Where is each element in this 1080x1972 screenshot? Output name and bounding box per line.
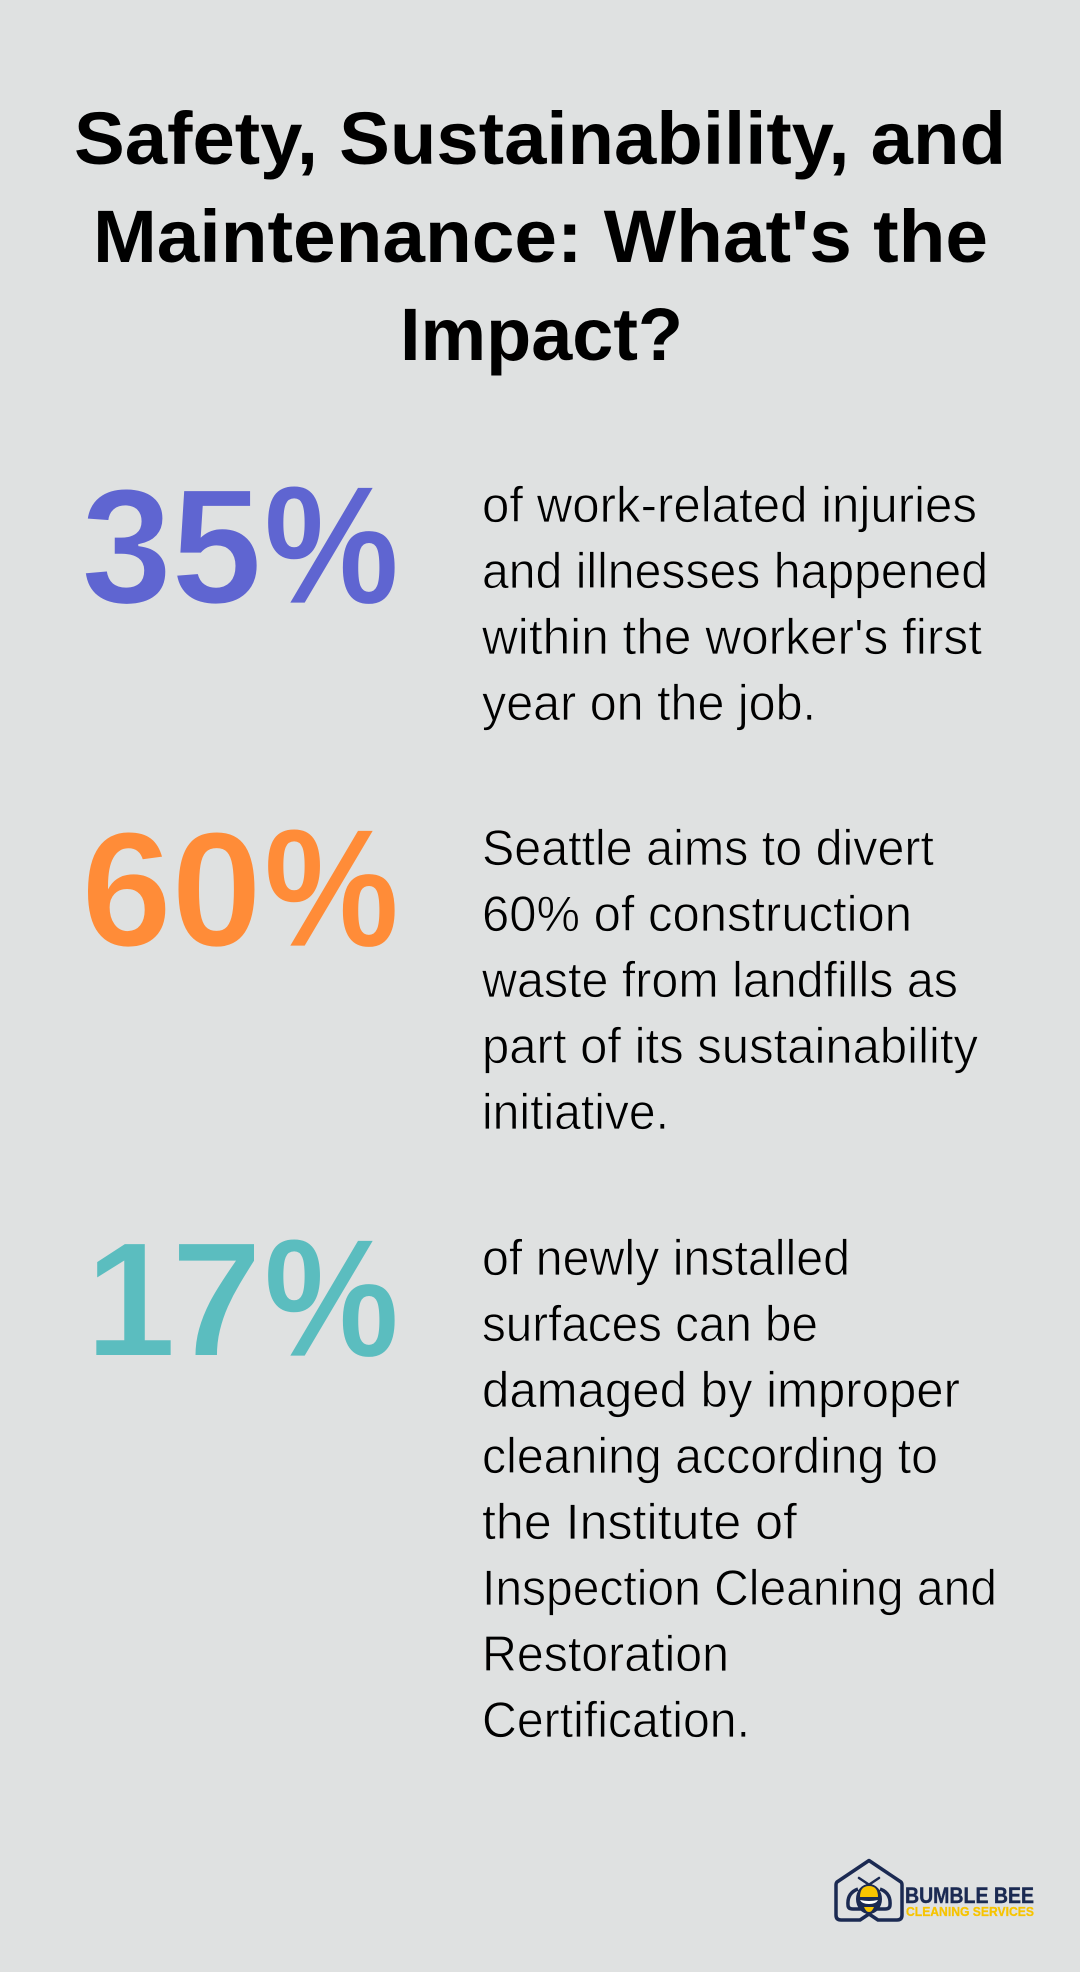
text block: improper cleaning damage: of newly installed xyxy=(482,1230,850,1286)
text block: Seattle construction waste xyxy=(481,820,978,1140)
title xyxy=(74,97,1006,376)
title: Safety, Sustainability, and xyxy=(74,97,1006,180)
text block: improper cleaning damage: cleaning according to xyxy=(482,1428,938,1484)
stat: 35%: 35 xyxy=(81,455,262,638)
stat: 60%: 60 xyxy=(81,798,262,981)
text block: work-related injuries: and illnesses happened xyxy=(482,543,988,599)
text block: Seattle construction waste: initiative. xyxy=(482,1084,669,1140)
text block: Seattle construction waste: waste from landfills as xyxy=(481,952,958,1008)
text block: work-related injuries xyxy=(481,477,988,731)
text block: improper cleaning damage: Inspection Cleaning and xyxy=(482,1560,997,1616)
text block: improper cleaning damage: surfaces can be xyxy=(482,1296,818,1352)
stat: 60% xyxy=(81,794,399,982)
text block: improper cleaning damage: Restoration xyxy=(482,1626,729,1682)
stat: 17% xyxy=(85,1204,399,1392)
stat: 17%: % xyxy=(264,1204,399,1392)
text block: work-related injuries: year on the job. xyxy=(482,675,816,731)
text block: improper cleaning damage: the Institute of xyxy=(482,1494,797,1550)
text block: Seattle construction waste: part of its sustainability xyxy=(482,1018,978,1074)
text block: Seattle construction waste: 60% of construction xyxy=(482,886,912,942)
icon: house with bee xyxy=(836,1860,902,1920)
stat: 60%: % xyxy=(264,794,399,982)
text block: work-related injuries: within the worker's first xyxy=(481,609,982,665)
title: Impact? xyxy=(400,293,683,376)
logo: Bumble Bee Cleaning Services xyxy=(836,1860,1034,1920)
title: Maintenance: What's the xyxy=(93,195,988,278)
text block: Seattle construction waste: Seattle aims to divert xyxy=(482,820,934,876)
wordmark: BUMBLE BEE xyxy=(905,1883,1034,1908)
stat: 35% xyxy=(81,451,399,639)
text block: work-related injuries: of work-related injuries xyxy=(482,477,977,533)
stat: 17%: 17 xyxy=(85,1208,262,1391)
text block: improper cleaning damage xyxy=(482,1230,997,1748)
text block: improper cleaning damage: damaged by improper xyxy=(482,1362,960,1418)
text block: improper cleaning damage: Certification. xyxy=(482,1692,750,1748)
stat: 35%: % xyxy=(264,451,399,639)
tagline: CLEANING SERVICES xyxy=(906,1904,1034,1919)
